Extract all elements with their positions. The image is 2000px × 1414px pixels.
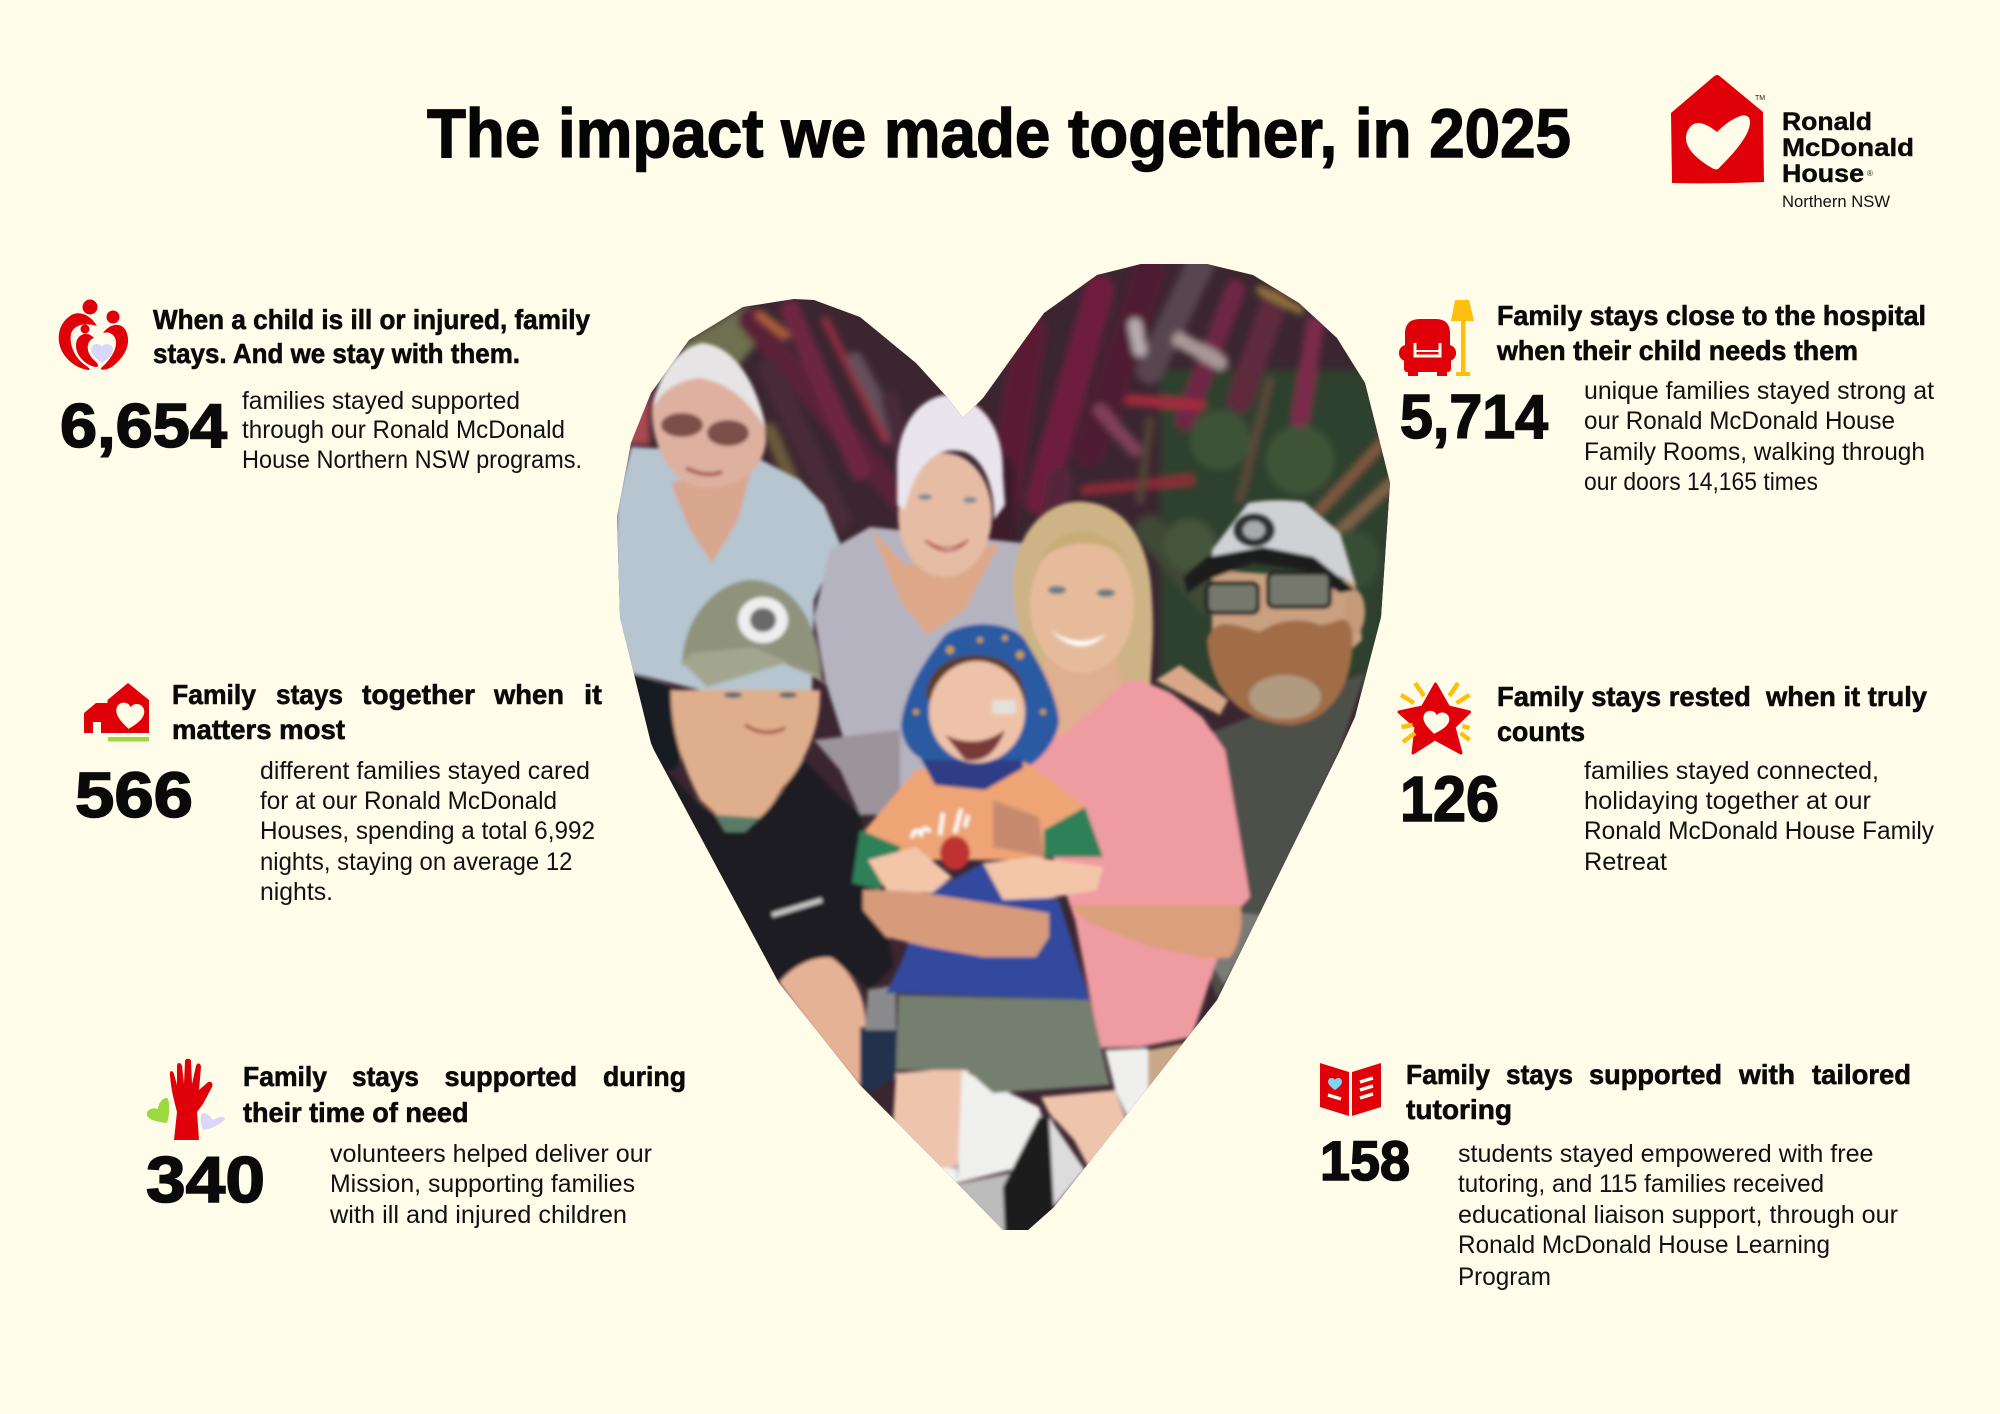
icon: armchair and lamp (1399, 300, 1474, 376)
description: our Ronald McDonald House (1584, 407, 1895, 435)
description: with ill and injured children (329, 1201, 627, 1229)
description: Ronald McDonald House Learning (1458, 1231, 1830, 1259)
panel: family stays rested (126) (1399, 681, 1934, 876)
description: unique families stayed strong at (1584, 377, 1934, 405)
heading: tailored (1812, 1059, 1911, 1090)
number: 340 (146, 1143, 265, 1216)
heading: with (1738, 1059, 1795, 1090)
photo: family inside a heart shape (600, 250, 1400, 1240)
title: The impact we made together, in 2025 (427, 95, 1571, 172)
child head and hat (901, 624, 1059, 765)
mum (1013, 502, 1153, 700)
heading: stays (352, 1061, 419, 1092)
description: our doors 14,165 times (1584, 468, 1818, 496)
description: holidaying together at our (1584, 787, 1871, 815)
description: volunteers helped deliver our (330, 1140, 652, 1168)
heading: Family stays close to the hospital (1497, 300, 1926, 331)
description: Program (1458, 1263, 1551, 1291)
heading (172, 679, 602, 745)
description: Mission, supporting families (330, 1170, 635, 1198)
description (1584, 757, 1934, 876)
icon: open book with heart (1320, 1063, 1381, 1116)
number: 126 (1400, 763, 1499, 835)
description: House Northern NSW programs. (242, 446, 582, 474)
heading: supported (444, 1061, 577, 1092)
description: Ronald McDonald House Family (1584, 817, 1934, 845)
description: families stayed supported (242, 387, 520, 415)
description: educational liaison support, through our (1458, 1201, 1898, 1229)
heading: stays (276, 679, 343, 710)
heading (1496, 300, 1926, 366)
dad (1190, 673, 1365, 1000)
boy (664, 758, 894, 990)
description: nights, staying on average 12 (260, 848, 572, 876)
heading: together (362, 679, 475, 710)
number: 158 (1320, 1129, 1410, 1192)
logo: Ronald McDonald House Northern NSW: McDonald (1782, 134, 1914, 162)
panel: family stays supported by volunteers (340) (146, 1059, 686, 1229)
description (260, 757, 595, 906)
description: families stayed connected, (1584, 757, 1879, 785)
description (1458, 1140, 1898, 1291)
heading (243, 1061, 686, 1128)
number: 566 (75, 759, 193, 831)
number: 6,654 (60, 392, 228, 461)
heading: matters most (172, 714, 345, 745)
logo: Ronald McDonald House Northern NSW: House (1782, 160, 1864, 188)
description: nights. (260, 878, 333, 906)
logo: Ronald McDonald House Northern NSW: ® (1867, 169, 1873, 178)
description: Retreat (1584, 848, 1667, 876)
panel: family stays close (5,714) (1399, 300, 1934, 496)
icon: family heart (59, 300, 128, 370)
grandpa (634, 672, 682, 772)
heading: Family stays rested when it truly (1497, 681, 1927, 712)
heading: tutoring (1406, 1094, 1512, 1125)
heading: it (584, 679, 602, 710)
logo: Ronald McDonald House Northern NSW: Northern NSW (1782, 192, 1890, 211)
logo: Ronald McDonald House Northern NSW: Ronald (1782, 108, 1872, 136)
description (1584, 377, 1934, 496)
description: Family Rooms, walking through (1584, 438, 1925, 466)
heading: Family (243, 1061, 327, 1092)
description: tutoring, and 115 families received (1458, 1170, 1824, 1198)
heading: When a child is ill or injured, family (153, 304, 590, 335)
white shorts and leg (1105, 1048, 1148, 1123)
heading: stays (1506, 1059, 1573, 1090)
description: through our Ronald McDonald (242, 416, 565, 444)
grandma (814, 527, 1030, 817)
heading: counts (1497, 716, 1585, 747)
description (242, 387, 582, 474)
heading: when (493, 679, 564, 710)
description (329, 1140, 652, 1229)
heading: Family (172, 679, 256, 710)
child body (865, 760, 1085, 860)
child shorts, legs and white cloth (893, 1067, 970, 1170)
description: different families stayed cared (260, 757, 590, 785)
heading: supported (1589, 1059, 1722, 1090)
heading (153, 304, 590, 369)
icon: star with heart and rays (1399, 683, 1470, 753)
panel: family stays supported with tutoring (158) (1320, 1059, 1911, 1291)
icon: raised hand with hearts (147, 1059, 225, 1140)
heading: their time of need (243, 1097, 468, 1128)
logo: Ronald McDonald House Northern NSW: TM (1755, 95, 1765, 102)
icon: house with heart (84, 683, 149, 742)
heading: during (603, 1061, 686, 1092)
heading: Family (1406, 1059, 1490, 1090)
panel: family stays together (566) (75, 679, 602, 906)
number: 5,714 (1400, 383, 1548, 452)
description: students stayed empowered with free (1458, 1140, 1874, 1168)
description: Houses, spending a total 6,992 (260, 817, 595, 845)
logo: Ronald McDonald House Northern NSW (1671, 75, 1914, 211)
icon: red house with heart (1671, 75, 1764, 183)
panel: family stays (6,654) (59, 300, 590, 474)
heading: stays. And we stay with them. (153, 338, 520, 369)
heading (1497, 681, 1927, 747)
heading (1406, 1059, 1911, 1125)
heading: when their child needs them (1496, 335, 1858, 366)
description: for at our Ronald McDonald (260, 787, 557, 815)
